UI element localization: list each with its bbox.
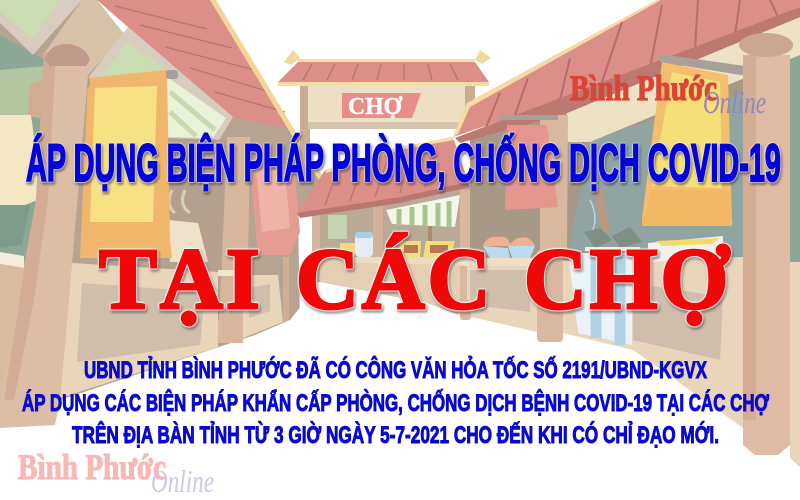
logo watermark bottom left: Online bbox=[151, 463, 214, 499]
redraw: posts that overlap the ground bbox=[0, 300, 790, 455]
title: red headline: TẠI bbox=[99, 230, 287, 327]
white ground cut-out below the illustration bbox=[0, 282, 800, 500]
illustration: left market stall bbox=[0, 0, 326, 428]
food trays bbox=[398, 241, 455, 258]
logo watermark bottom left: Bình Phước bbox=[18, 447, 166, 487]
CHỢ sign bbox=[342, 93, 421, 120]
logo watermark top right: Online bbox=[703, 84, 766, 120]
title: red headline: CHỢ bbox=[524, 230, 731, 327]
steam and stacked trays bbox=[168, 190, 208, 262]
awning bbox=[386, 195, 460, 227]
right banner fringe bbox=[643, 190, 732, 225]
logo watermark top right: Bình Phước bbox=[570, 68, 717, 108]
illustration: right market stall bbox=[453, 0, 800, 467]
yellow tray bbox=[642, 218, 733, 262]
CHỢ sign: CHỢ bbox=[348, 94, 403, 120]
illustration: central stall with CHỢ sign bbox=[278, 50, 491, 320]
jars bbox=[340, 232, 373, 257]
title: red headline: CÁC bbox=[296, 230, 518, 327]
text block: notice bbox=[22, 355, 769, 449]
steam and skewers bbox=[584, 200, 642, 251]
bowls bbox=[483, 237, 535, 258]
